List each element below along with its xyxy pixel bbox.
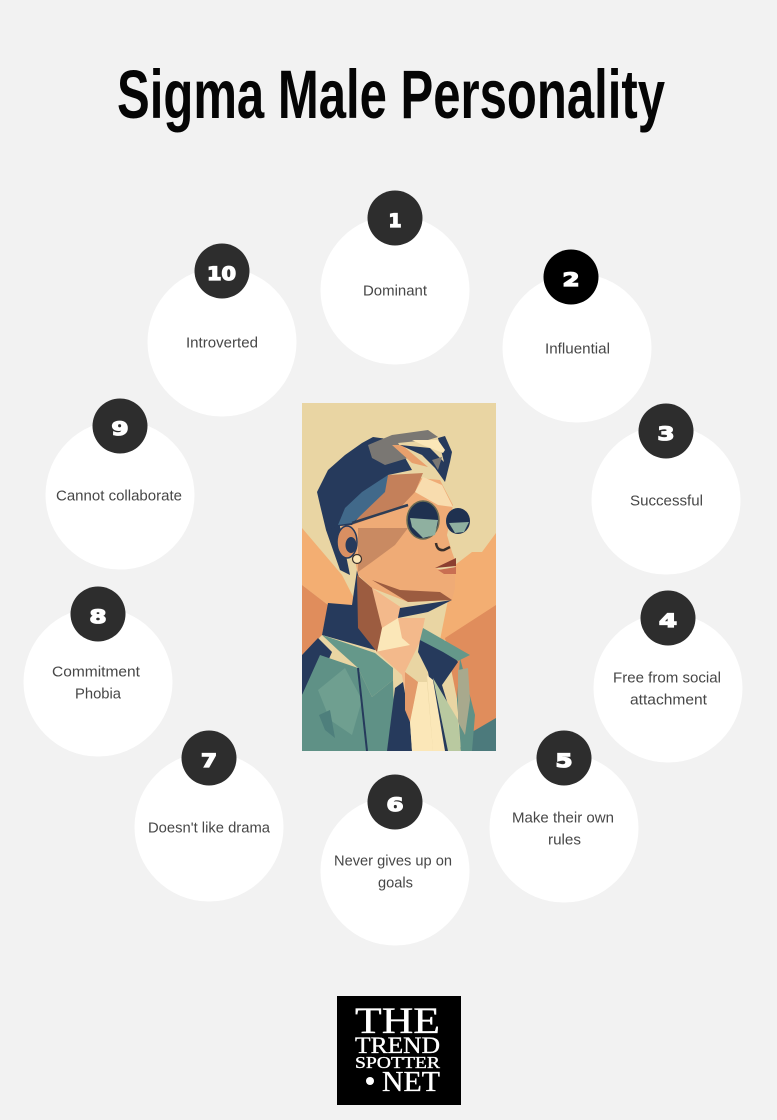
item 5: Make their own rules: 5 [556,751,572,772]
item 10: Introverted [148,244,296,416]
item 2: Influential [502,250,652,422]
item 8: Commitment Phobia: Phobia [75,686,122,702]
item 8: Commitment Phobia: 8 [90,607,106,628]
item 10: Introverted: 10 [207,264,236,285]
item 2: Influential: 2 [562,270,580,291]
item 4: Free from social attachment: Free from social [613,670,721,686]
ear [337,526,357,558]
item 1: Dominant: Dominant [363,284,427,300]
item 10: Introverted: Introverted [186,336,258,352]
item 1: Dominant: 1 [388,211,402,232]
item 5: Make their own rules: Make their own [512,810,614,826]
lips and nose [435,558,456,568]
hair [317,437,412,535]
item 6: Never gives up on goals: goals [378,876,413,892]
jacket [302,638,332,695]
logo: The Trend Spotter .net: TREND [355,1033,440,1058]
item 3: Successful: Successful [630,494,703,510]
item 6: Never gives up on goals: Never gives up on [334,854,452,870]
logo: The Trend Spotter .net [337,996,461,1105]
item 9: Cannot collaborate: Cannot collaborate [56,488,182,504]
item 5: Make their own rules [490,730,638,902]
item 6: Never gives up on goals [320,774,470,946]
item 4: Free from social attachment [594,590,742,762]
item 6: Never gives up on goals: 6 [386,795,404,816]
item 1: Dominant [320,190,470,364]
item 4: Free from social attachment: attachment [630,692,707,708]
logo: The Trend Spotter .net: THE [355,1001,440,1042]
item 9: Cannot collaborate [46,398,194,570]
logo: The Trend Spotter .net: SPOTTER [355,1053,441,1072]
sunglasses [352,505,408,523]
item 7: Doesn't like drama: 7 [201,751,217,772]
item 3: Successful [592,404,740,574]
portrait illustration [302,403,496,751]
logo: The Trend Spotter .net: NET [382,1066,440,1098]
item 7: Doesn't like drama [134,730,284,902]
item 4: Free from social attachment: 4 [659,611,677,632]
item 9: Cannot collaborate: 9 [112,419,128,440]
item 8: Commitment Phobia [24,586,172,756]
item 2: Influential: Influential [545,342,610,358]
item 8: Commitment Phobia: Commitment [52,664,140,680]
item 3: Successful: 3 [658,424,674,445]
item 7: Doesn't like drama: Doesn't like drama [148,820,271,836]
item 5: Make their own rules: rules [548,832,581,848]
